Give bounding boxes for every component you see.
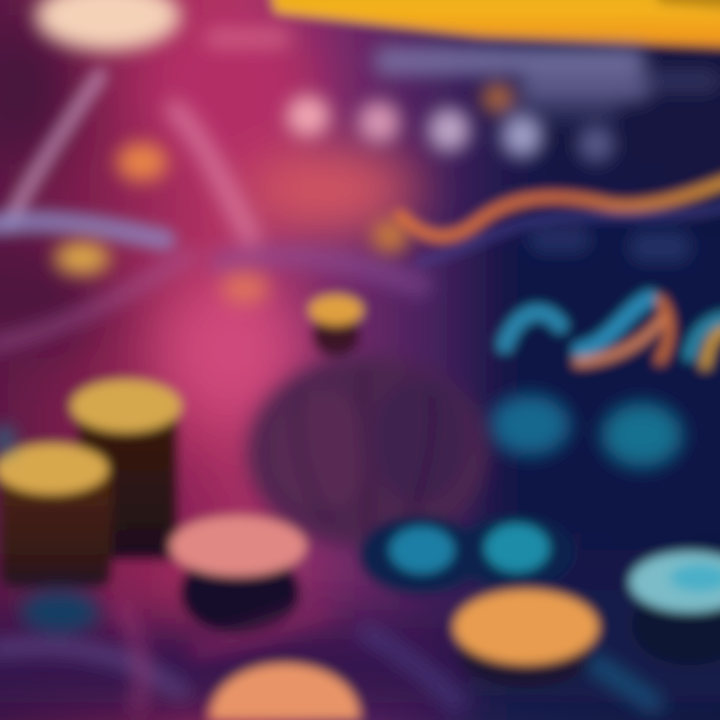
blue circles — [490, 395, 682, 467]
blurred label marks on the right — [530, 228, 690, 262]
pink bowl — [170, 516, 306, 634]
top-left moon — [36, 0, 180, 50]
foreground streaks — [0, 600, 660, 712]
left diagonal light line — [0, 75, 165, 240]
stack reflection — [0, 426, 100, 634]
cyan bowl — [630, 552, 720, 665]
blurred title text — [375, 48, 720, 121]
row of pale dots — [287, 96, 614, 162]
brain folds — [297, 370, 433, 530]
small central cup — [309, 295, 363, 357]
orange wave line — [400, 180, 720, 262]
coin stack front — [0, 444, 112, 588]
orange bowl — [454, 590, 598, 687]
top yellow banner — [265, 0, 720, 48]
orange spots — [55, 143, 408, 304]
top faint heading — [205, 28, 290, 48]
teal glasses — [358, 514, 575, 595]
rainbow arcs — [505, 298, 720, 365]
pink curve — [0, 110, 420, 345]
coin stack back — [71, 380, 181, 560]
bottom coral bowl — [210, 664, 360, 720]
brain — [248, 356, 488, 548]
